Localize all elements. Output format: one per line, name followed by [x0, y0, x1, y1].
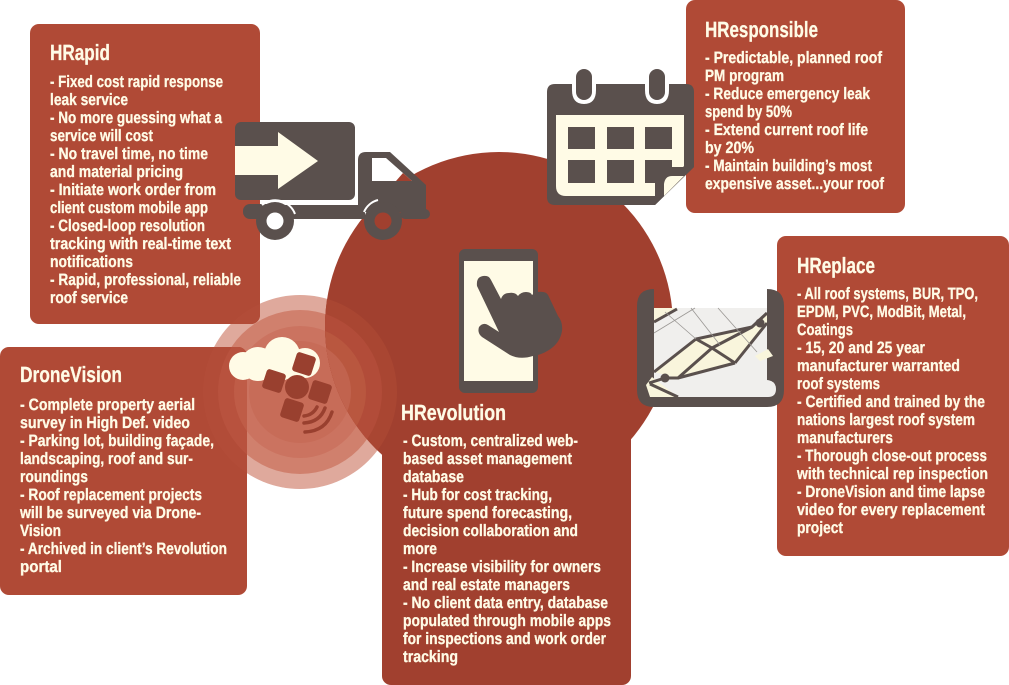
- body: HRapid bullets: notifications: [50, 253, 133, 271]
- body: HRevolution bullets: - Hub for cost tracking,: [403, 486, 552, 504]
- text: HRevolution: [401, 400, 611, 666]
- body: DroneVision bullets: portal: [20, 558, 62, 576]
- body: HRevolution bullets: based asset management: [403, 450, 572, 468]
- body: HRapid bullets: - Closed-loop resolution: [50, 217, 205, 235]
- panel: HRevolution: [382, 400, 631, 685]
- body: HRapid bullets: and material pricing: [50, 163, 183, 181]
- body: HReplace bullets: Coatings: [797, 321, 853, 339]
- central circle: [325, 152, 673, 500]
- body: DroneVision bullets: roundings: [20, 468, 88, 486]
- text: HReplace: [796, 253, 988, 537]
- heading: HResponsible: HResponsible: [705, 17, 818, 42]
- icon: calendar: [547, 69, 694, 205]
- body: HResponsible bullets: [705, 49, 884, 193]
- body: HRevolution bullets: tracking: [403, 648, 458, 666]
- heading: HReplace: HReplace: [797, 253, 875, 278]
- body: DroneVision bullets: - Parking lot, building façade,: [20, 432, 214, 450]
- body: HReplace bullets: manufacturers: [797, 429, 893, 447]
- panel: DroneVision: [0, 347, 247, 595]
- body: HRevolution bullets: future spend forecasting,: [403, 504, 572, 522]
- body: DroneVision bullets: [19, 396, 227, 576]
- body: DroneVision bullets: survey in High Def. video: [20, 414, 190, 432]
- body: HReplace bullets: project: [797, 519, 843, 537]
- body: HReplace bullets: roof systems: [797, 375, 880, 393]
- body: HResponsible bullets: - Extend current roof life: [705, 121, 868, 139]
- icon: phone with pointing hand: [459, 249, 562, 393]
- body: HRapid bullets: - Initiate work order from: [50, 181, 216, 199]
- body: HRapid bullets: leak service: [50, 91, 128, 109]
- body: HRevolution bullets: [403, 432, 611, 666]
- body: DroneVision bullets: - Complete property aerial: [20, 396, 195, 414]
- body: DroneVision bullets: - Archived in client’s Revolution: [20, 540, 227, 558]
- icon: drone with cloud: [229, 337, 333, 432]
- heading: HRevolution: HRevolution: [401, 400, 506, 425]
- body: HRevolution bullets: - Increase visibility for owners: [403, 558, 601, 576]
- body: HRapid bullets: - No travel time, no time: [50, 145, 208, 163]
- body: HReplace bullets: [796, 285, 988, 537]
- body: HResponsible bullets: - Predictable, planned roof: [705, 49, 882, 67]
- body: HRevolution bullets: more: [403, 540, 437, 558]
- body: HRevolution bullets: decision collaboration and: [403, 522, 578, 540]
- body: HReplace bullets: manufacturer warranted: [797, 357, 960, 375]
- body: HResponsible bullets: PM program: [705, 67, 784, 85]
- body: HRapid bullets: - Rapid, professional, reliable: [50, 271, 241, 289]
- body: DroneVision bullets: landscaping, roof and sur-: [20, 450, 193, 468]
- drone signal rings: [203, 295, 397, 489]
- body: HResponsible bullets: expensive asset...your roof: [705, 175, 884, 193]
- body: HRapid bullets: [50, 73, 241, 307]
- body: HRapid bullets: service will cost: [50, 127, 153, 145]
- panel: HRapid: [30, 24, 260, 324]
- body: DroneVision bullets: - Roof replacement projects: [20, 486, 202, 504]
- body: HReplace bullets: - 15, 20 and 25 year: [797, 339, 925, 357]
- body: HRevolution bullets: - No client data entry, database: [403, 594, 608, 612]
- text: HResponsible: [705, 17, 884, 193]
- icon: delivery truck: [235, 122, 430, 240]
- body: HRapid bullets: - No more guessing what a: [50, 109, 223, 127]
- panel: HResponsible: [686, 0, 905, 213]
- body: HRevolution bullets: and real estate managers: [403, 576, 570, 594]
- body: HRevolution bullets: for inspections and work order: [403, 630, 606, 648]
- body: HResponsible bullets: - Maintain building’s most: [705, 157, 872, 175]
- body: HRapid bullets: - Fixed cost rapid response: [50, 73, 223, 91]
- icon: roof blueprint frame: [637, 289, 784, 407]
- body: HRapid bullets: tracking with real-time text: [50, 235, 231, 253]
- body: HRapid bullets: roof service: [50, 289, 128, 307]
- rings over central circle: [325, 299, 390, 450]
- text: DroneVision: [19, 362, 227, 576]
- body: HReplace bullets: EPDM, PVC, ModBit, Metal,: [797, 303, 966, 321]
- body: HReplace bullets: nations largest roof system: [797, 411, 975, 429]
- body: HResponsible bullets: spend by 50%: [705, 103, 792, 121]
- text: HRapid: [50, 40, 241, 307]
- body: DroneVision bullets: Vision: [20, 522, 61, 540]
- body: HResponsible bullets: by 20%: [705, 139, 754, 157]
- heading: HRapid: HRapid: [50, 40, 110, 65]
- body: HResponsible bullets: - Reduce emergency leak: [705, 85, 871, 103]
- body: HRapid bullets: client custom mobile app: [50, 199, 208, 217]
- body: HRevolution bullets: - Custom, centralized web-: [403, 432, 578, 450]
- heading: DroneVision: DroneVision: [20, 362, 122, 387]
- panel: HReplace: [777, 236, 1009, 556]
- body: HRevolution bullets: database: [403, 468, 464, 486]
- rings over panels: [234, 316, 260, 432]
- body: DroneVision bullets: will be surveyed via Drone-: [19, 504, 201, 522]
- body: HRevolution bullets: populated through mobile apps: [403, 612, 611, 630]
